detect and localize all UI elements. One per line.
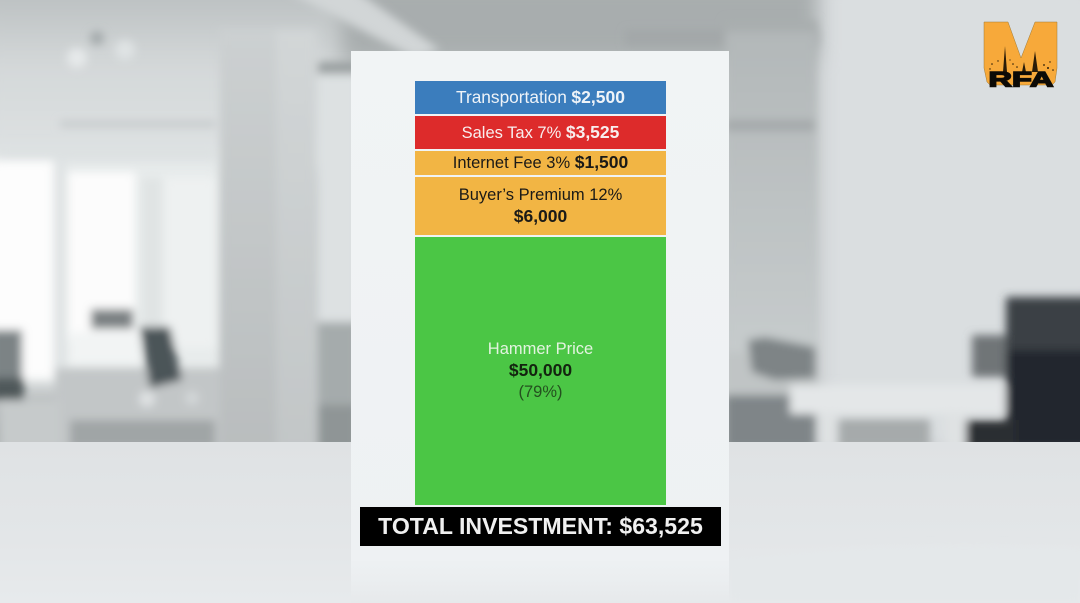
right bay bbox=[725, 22, 817, 352]
segment: buyer's premium: Buyer’s Premium 12% bbox=[459, 186, 622, 204]
segment: transportation bbox=[415, 81, 666, 114]
segment: sales tax bbox=[415, 116, 666, 149]
soft background masses bbox=[0, 0, 1080, 455]
segment: hammer price: $50,000 bbox=[509, 360, 572, 380]
segment: internet fee: Internet Fee 3% $1,500 bbox=[453, 152, 628, 172]
segment: sales tax: Sales Tax 7% $3,525 bbox=[462, 122, 619, 142]
black monitor / chair bbox=[972, 335, 1006, 377]
total investment banner: TOTAL INVESTMENT: $63,525 bbox=[378, 513, 703, 539]
behind-card bay bbox=[318, 62, 358, 74]
sharper background shapes bbox=[0, 0, 1080, 452]
segment: transportation: Transportation $2,500 bbox=[456, 86, 625, 106]
left chair bbox=[0, 330, 22, 382]
segment: buyer's premium bbox=[415, 177, 666, 235]
table surface bbox=[0, 442, 1080, 603]
logo grunge spires bbox=[989, 46, 1054, 72]
windows bbox=[0, 161, 53, 379]
white desk bbox=[790, 385, 1005, 414]
total investment banner bbox=[360, 507, 721, 546]
segment: hammer price: (79%) bbox=[518, 383, 562, 401]
segment: internet fee bbox=[415, 151, 666, 175]
logo M bbox=[984, 22, 1057, 85]
logo: M RFA bbox=[984, 22, 1058, 90]
ceiling beam bbox=[285, 0, 440, 58]
ceiling lights bbox=[67, 48, 87, 68]
left floor bbox=[55, 368, 220, 450]
desk and monitor bbox=[70, 332, 140, 364]
segment: hammer price: Hammer Price bbox=[488, 340, 593, 358]
segment: hammer price bbox=[415, 237, 666, 505]
table highlight bbox=[730, 547, 1080, 603]
white card panel bbox=[351, 51, 729, 561]
right chair bbox=[748, 337, 815, 380]
card reflection bbox=[351, 555, 729, 603]
pillar bbox=[220, 30, 280, 450]
centre chair bbox=[140, 327, 182, 388]
segment: buyer's premium: $6,000 bbox=[514, 206, 567, 226]
